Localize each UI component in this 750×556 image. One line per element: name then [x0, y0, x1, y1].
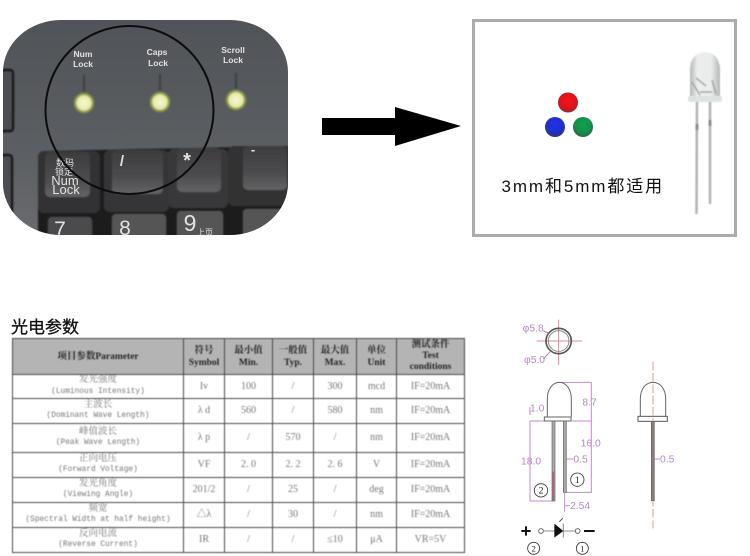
parameter table: nm — [370, 432, 383, 443]
keyboard labels: Lock — [223, 55, 243, 65]
keyboard labels: 9 — [184, 210, 196, 236]
parameter table: 主波长 — [84, 400, 112, 410]
parameter table: IF=20mA — [411, 432, 450, 443]
diode symbol: 2 — [532, 543, 536, 553]
parameter table: λ d — [198, 405, 210, 416]
parameter table: 一般值 — [279, 346, 307, 356]
panel: LED product — [472, 19, 737, 237]
parameter table: 正向电压 — [79, 454, 117, 464]
parameter table: 峰值波长 — [79, 426, 117, 436]
arrow — [322, 107, 461, 146]
parameter table: Typ. — [284, 358, 302, 368]
parameter table: / — [292, 405, 294, 416]
parameter table: 2. 2 — [286, 459, 300, 470]
parameter table: Symbol — [189, 358, 219, 368]
dimension drawing of LED — [521, 320, 675, 555]
parameter table: 频宽 — [88, 504, 108, 514]
parameter table: 最大值 — [321, 346, 349, 356]
front view — [521, 382, 601, 512]
parameter table: λ p — [198, 432, 210, 443]
parameter table: mcd — [368, 380, 385, 392]
parameter table: IF=20mA — [411, 509, 450, 520]
parameter table: Max. — [325, 358, 345, 368]
parameter table: IR — [199, 534, 209, 545]
parameter table: 2. 6 — [328, 459, 342, 470]
parameter table: 570 — [286, 432, 300, 443]
parameter table: 201/2 — [193, 484, 215, 495]
keyboard labels: * — [183, 150, 191, 172]
parameter table: Unit — [368, 358, 385, 368]
keyboard labels: 上页 — [197, 227, 213, 238]
parameter table: 580 — [328, 405, 342, 416]
front view: 16.0 — [581, 439, 601, 450]
parameter table: Min. — [239, 358, 258, 368]
parameter table: 25 — [288, 484, 298, 495]
diode symbol: 1 — [580, 543, 584, 553]
parameter table: (Viewing Angle) — [63, 491, 133, 499]
keyboard labels: Lock — [73, 59, 93, 69]
parameter table: (Reverse Current) — [58, 541, 138, 549]
parameter table: 符号 — [194, 346, 214, 356]
parameter table: IF=20mA — [411, 380, 450, 392]
keyboard labels — [51, 45, 255, 241]
parameter table: / — [247, 432, 250, 443]
parameter table: (Peak Wave Length) — [56, 439, 140, 447]
parameter table: Test — [422, 351, 439, 361]
parameter table: (Luminous Intensity) — [51, 388, 145, 396]
keyboard labels: Caps — [147, 47, 168, 57]
parameter table: 560 — [241, 405, 256, 416]
keyboard labels: Num — [51, 173, 79, 188]
keyboard photo with indicator lights — [3, 20, 288, 235]
parameter table: VR=5V — [415, 534, 446, 545]
keyboard labels: Scroll — [221, 45, 245, 55]
parameter table: 测试条件 — [411, 340, 450, 350]
parameter table: IF=20mA — [411, 459, 450, 470]
parameter table: / — [334, 509, 336, 520]
parameter table: (Spectral Width at half height) — [25, 516, 171, 524]
keyboard labels: Num — [74, 49, 93, 59]
parameter table: / — [292, 380, 294, 392]
front view: 1.0 — [530, 404, 545, 415]
top view: φ5.0 — [524, 355, 545, 366]
parameter table: IF=20mA — [411, 484, 450, 495]
parameter table: conditions — [410, 362, 451, 372]
parameter table: 300 — [328, 380, 342, 392]
keyboard labels: 数码 — [56, 156, 74, 169]
parameter table: V — [373, 459, 380, 470]
colour dots — [545, 92, 593, 137]
parameter table: 最小值 — [234, 346, 263, 356]
parameter table: 100 — [241, 380, 256, 392]
front view: 2 — [539, 486, 544, 497]
front view: 1 — [575, 475, 580, 486]
parameter table: (Forward Voltage) — [58, 466, 138, 474]
keyboard labels: - — [251, 142, 255, 157]
front view: 2.54 — [570, 501, 590, 512]
parameter table: / — [292, 534, 294, 545]
caption: 3mm和5mm都适用 — [502, 177, 664, 196]
parameter table: / — [334, 484, 336, 495]
parameter table: / — [247, 509, 250, 520]
parameter table: nm — [370, 405, 383, 416]
parameter table: / — [247, 484, 250, 495]
heading: 光电参数: 光电参数 — [11, 318, 79, 337]
parameter table: IF=20mA — [411, 405, 450, 416]
parameter table: μA — [370, 534, 383, 545]
side view — [638, 362, 675, 528]
side view: 0.5 — [660, 455, 675, 466]
icon: LED component — [688, 52, 722, 214]
front view: 8.7 — [582, 398, 597, 409]
keyboard labels: Lock — [148, 58, 168, 68]
top view: φ5.8 — [523, 324, 544, 335]
parameter table: VF — [198, 459, 210, 470]
parameter table: 项目参数Parameter — [57, 352, 139, 362]
top view — [523, 320, 582, 366]
parameter table: deg — [369, 484, 384, 495]
parameter table: 30 — [288, 509, 298, 520]
parameter table: 单位 — [367, 346, 386, 356]
parameter table: / — [247, 534, 250, 545]
front view: 18.0 — [521, 457, 541, 468]
keyboard labels: Lock — [52, 182, 80, 197]
parameter table: 发光强度 — [79, 375, 117, 385]
parameter table: nm — [370, 509, 383, 520]
parameter table: Iv — [200, 380, 208, 392]
keyboard labels: 8 — [119, 217, 131, 240]
parameter table: △λ — [197, 509, 211, 520]
diode symbol — [521, 518, 595, 554]
parameter table: ≤10 — [327, 534, 343, 545]
parameter table — [11, 337, 466, 554]
keyboard labels: / — [120, 153, 125, 170]
parameter table: 发光角度 — [79, 478, 117, 488]
parameter table: (Dominant Wave Length) — [47, 412, 149, 420]
keyboard labels: 锁定 — [55, 165, 73, 178]
parameter table: 2. 0 — [241, 459, 256, 470]
parameter table: / — [334, 432, 336, 443]
keyboard labels: 7 — [54, 218, 66, 241]
parameter table: 反向电流 — [79, 528, 117, 538]
front view: 0.5 — [573, 455, 588, 466]
